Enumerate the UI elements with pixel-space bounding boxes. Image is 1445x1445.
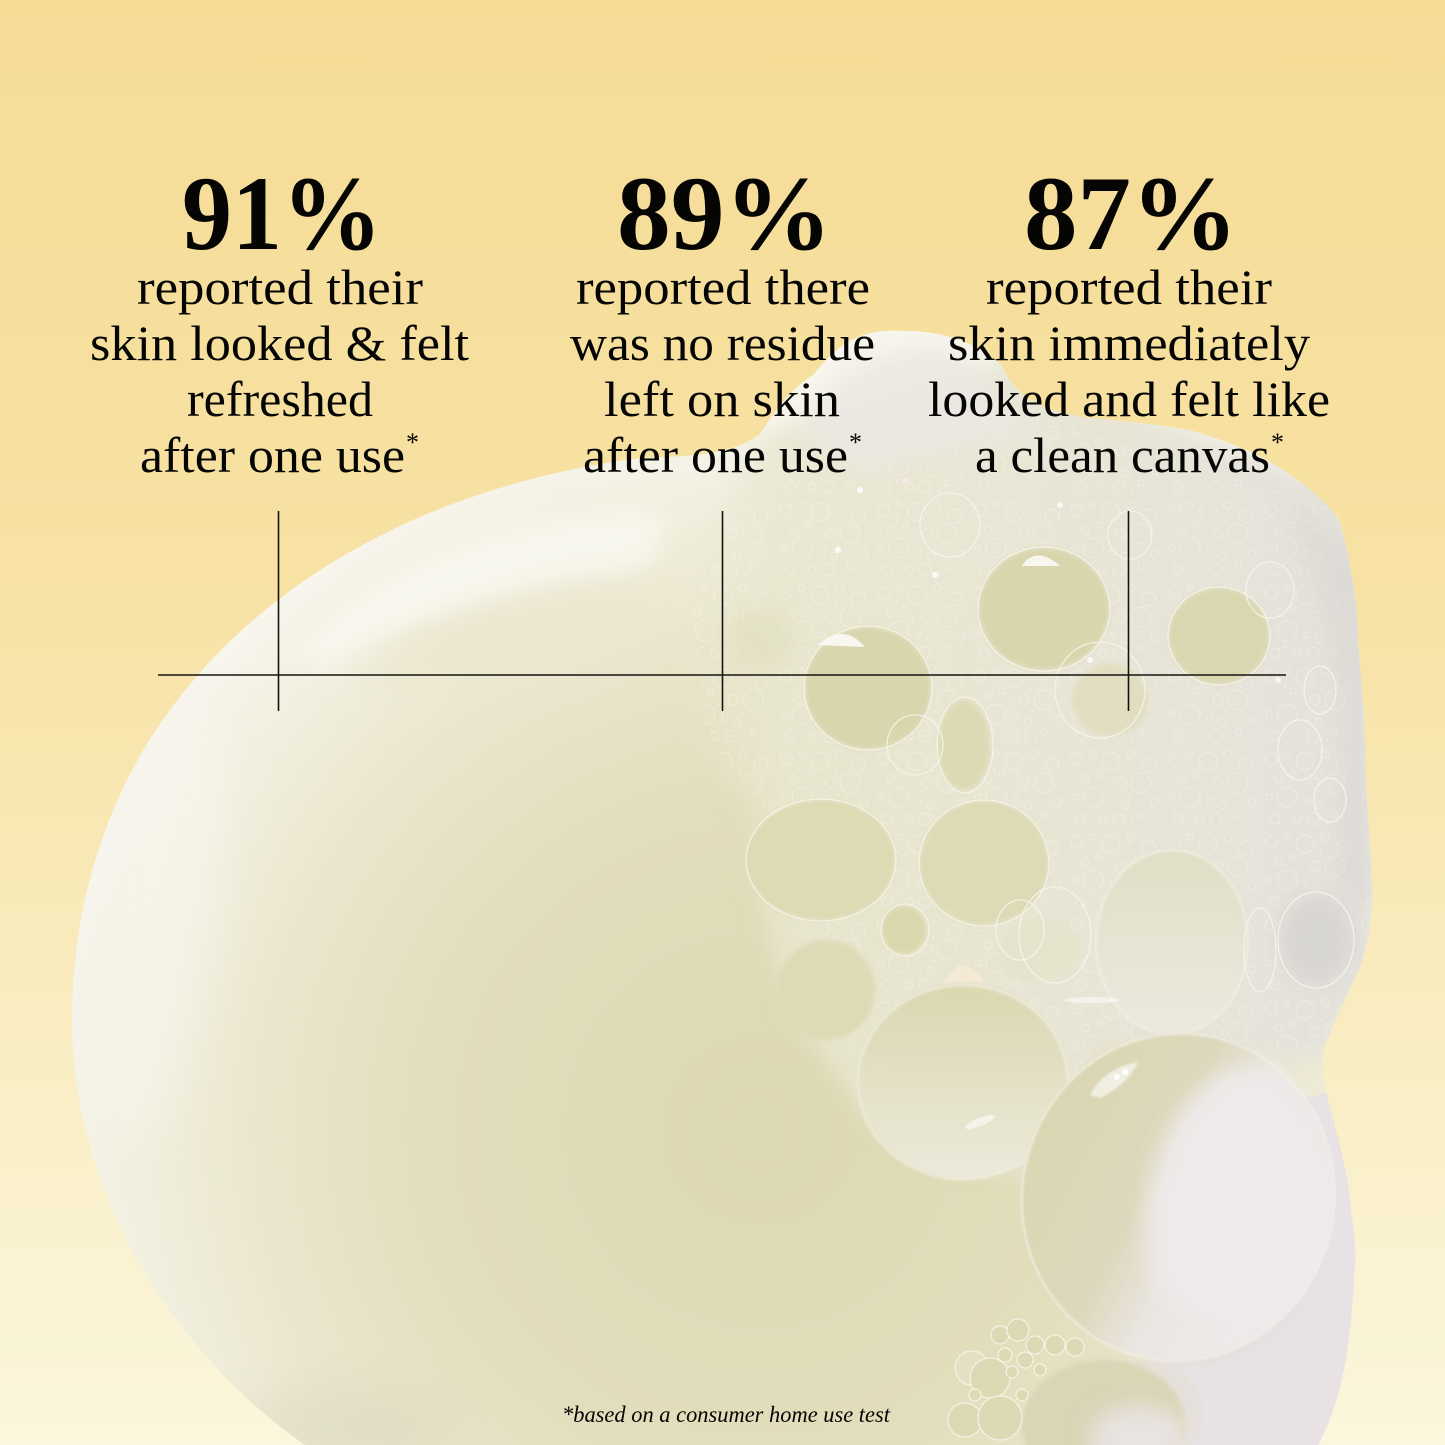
description <box>90 259 469 483</box>
description: a clean canvas <box>975 427 1270 483</box>
grey shading on foam edge <box>1308 528 1368 888</box>
value: 91% <box>182 155 382 272</box>
stat: 89% <box>570 155 875 483</box>
description: skin immediately <box>948 315 1310 371</box>
description: reported their <box>986 259 1272 315</box>
olive bubbles <box>724 548 1269 984</box>
bubble highlights <box>818 477 1281 1132</box>
description: reported their <box>137 259 423 315</box>
large pale bubbles <box>777 850 1352 1179</box>
foam top ridge <box>818 354 1016 464</box>
description: after one use <box>140 427 405 483</box>
cream blob <box>72 331 1372 1445</box>
value: 89% <box>617 155 832 272</box>
bubble walls <box>746 493 1354 992</box>
bottom bubbles <box>1023 1360 1192 1445</box>
description: after one use <box>583 427 848 483</box>
description: refreshed <box>187 371 373 427</box>
foam texture <box>692 418 1364 1072</box>
largest bubble <box>1020 1034 1336 1362</box>
value: 87% <box>1024 155 1238 272</box>
description: * <box>1271 428 1284 457</box>
lower right body <box>1133 1092 1355 1438</box>
description: skin looked & felt <box>90 315 469 371</box>
chart lines: axis and three markers <box>158 511 1286 711</box>
stat: 87% <box>928 155 1330 483</box>
cleanser swatch with foam <box>72 331 1380 1445</box>
description: left on skin <box>604 371 840 427</box>
description <box>928 259 1330 483</box>
description <box>570 259 875 483</box>
foam mass <box>680 360 1380 1180</box>
description: was no residue <box>570 315 875 371</box>
footnote: *based on a consumer home use test <box>562 1402 891 1427</box>
bottom foam cluster <box>948 1319 1084 1440</box>
glossy highlight <box>78 510 676 1445</box>
description: reported there <box>576 259 870 315</box>
stat: 91% <box>90 155 469 483</box>
description: * <box>406 428 419 457</box>
description: looked and felt like <box>928 371 1330 427</box>
description: * <box>849 428 862 457</box>
